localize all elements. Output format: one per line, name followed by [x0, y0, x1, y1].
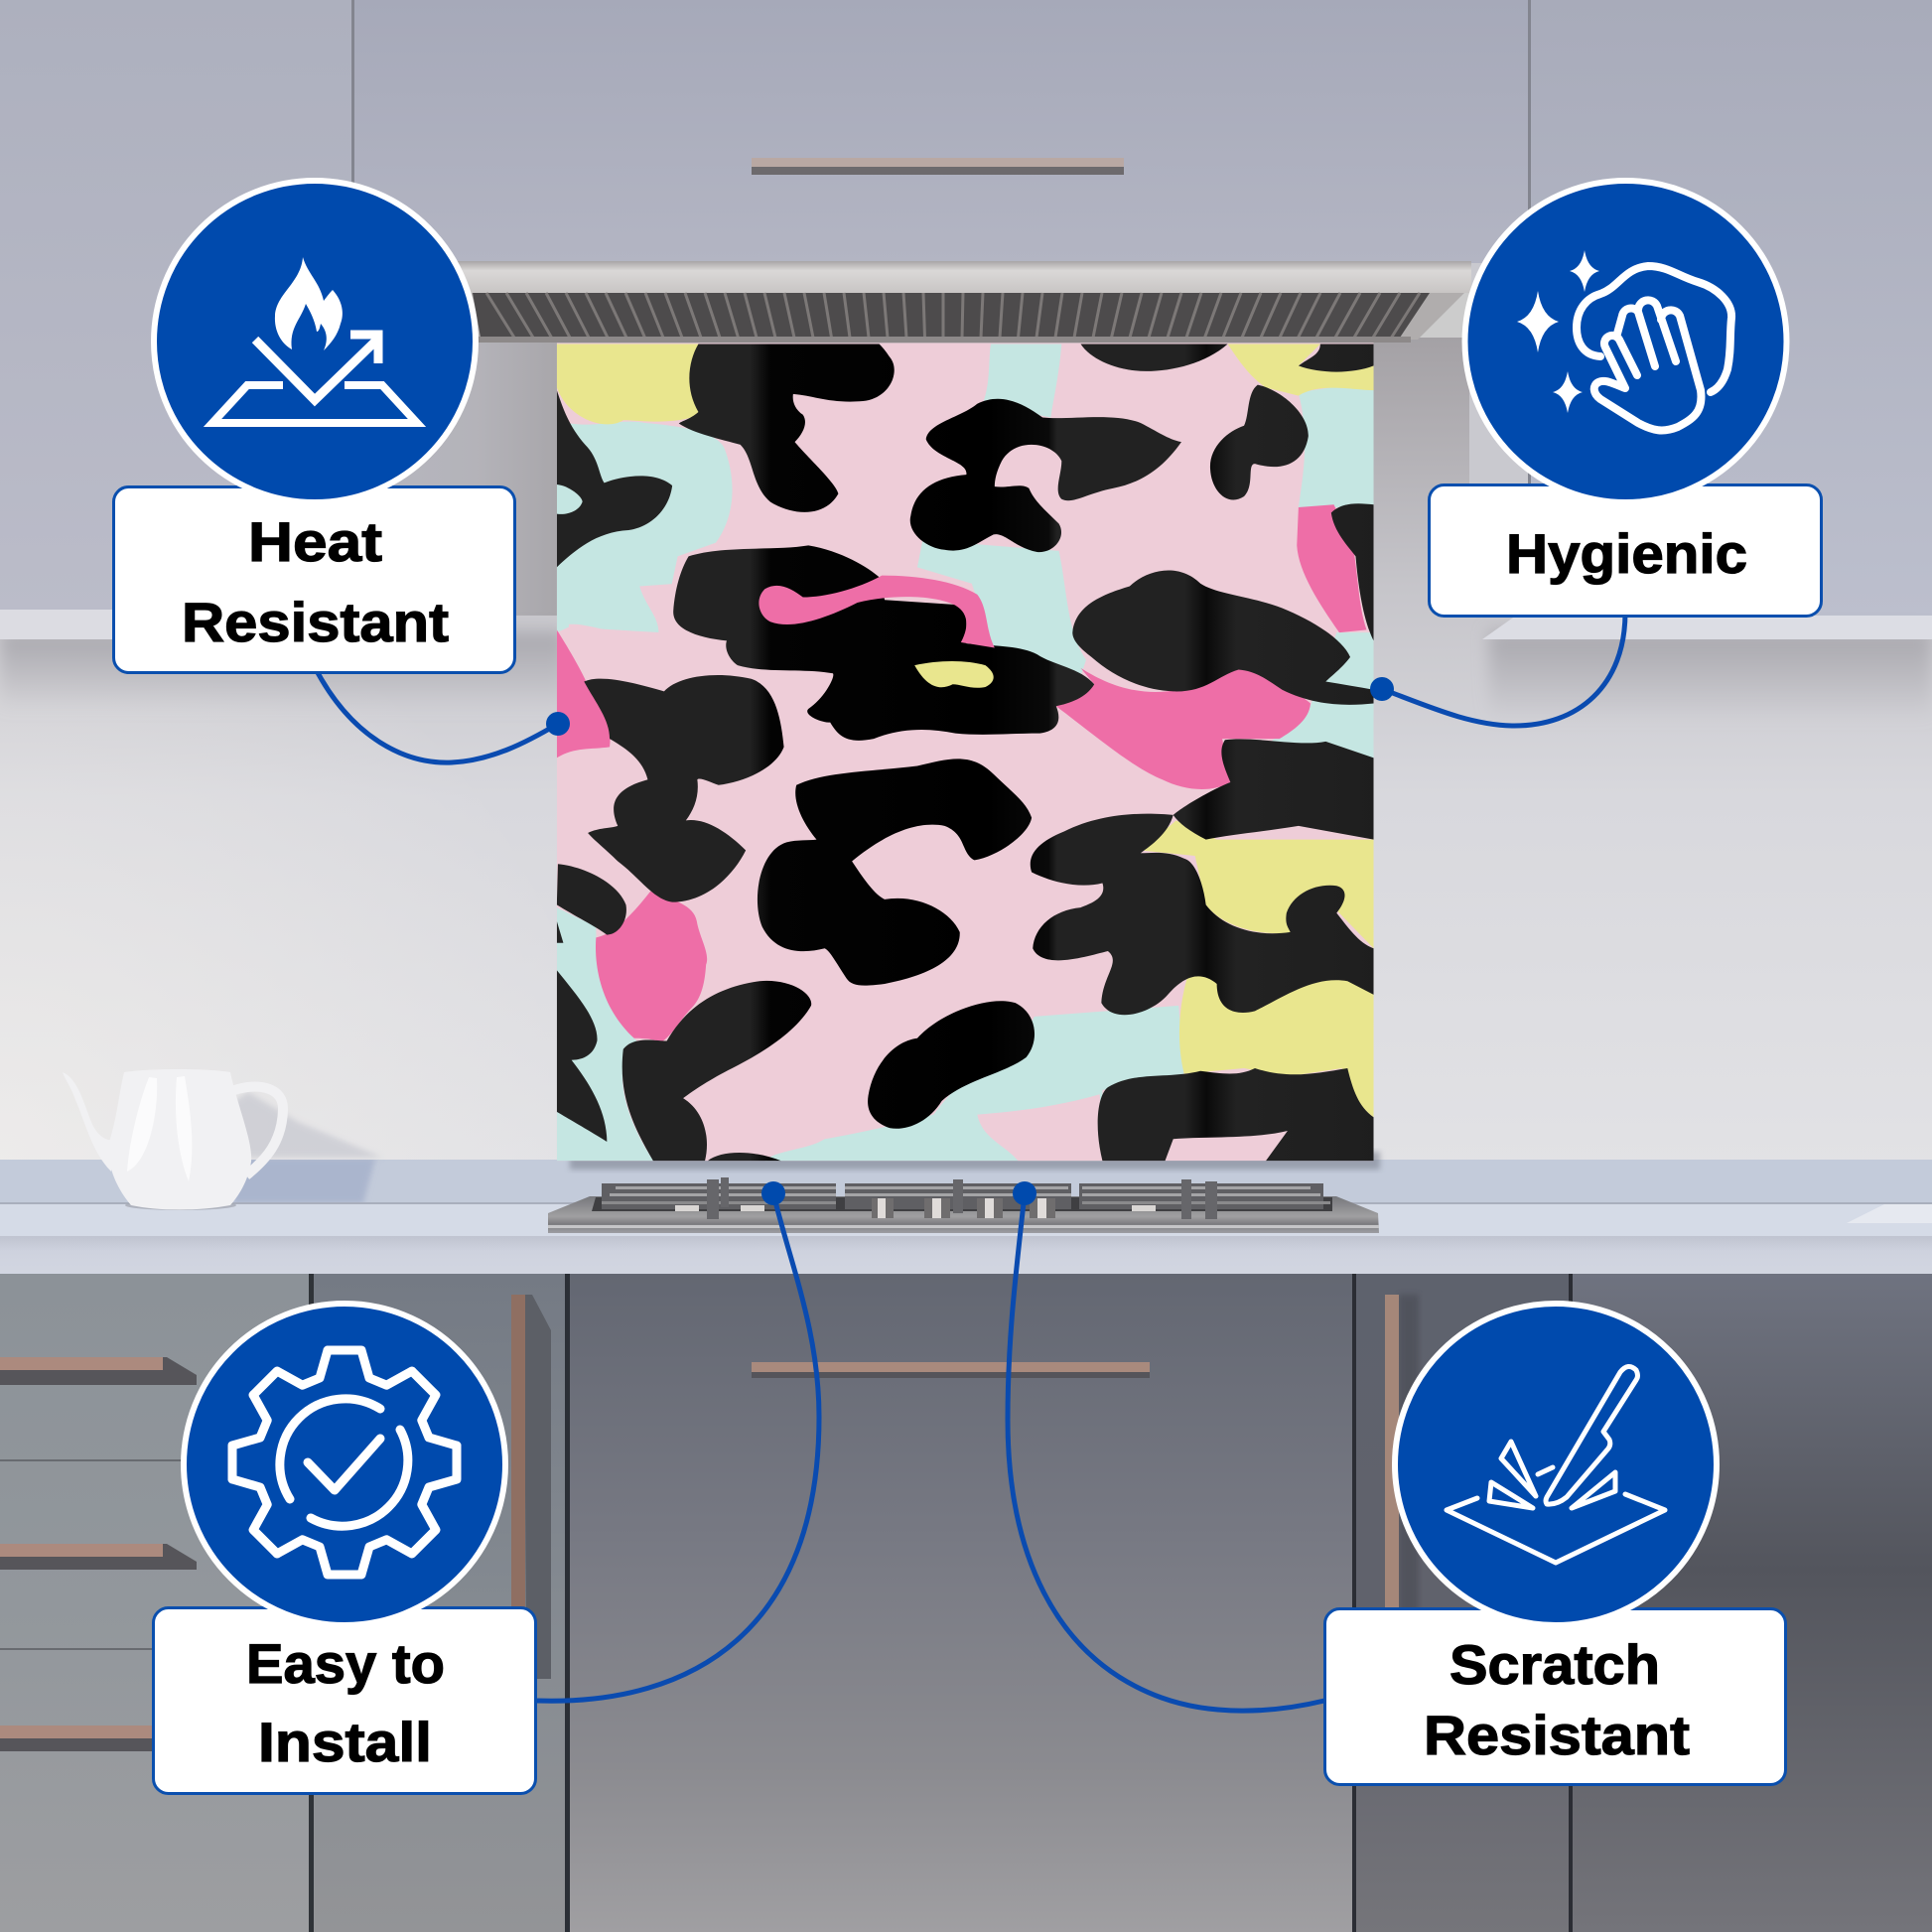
black spots — [557, 344, 1374, 1161]
icon circle — [154, 181, 476, 502]
label text: Resistant — [182, 591, 449, 653]
callout: hygienic — [1430, 181, 1821, 616]
teapot shadow on worktop — [233, 1158, 375, 1203]
label box — [153, 1608, 536, 1793]
wall tiles — [0, 338, 1932, 1172]
callout: scratch resistant — [1324, 1304, 1785, 1785]
label box — [1430, 484, 1821, 616]
upper cabinets — [0, 0, 1932, 616]
splashback panel shadow — [570, 1152, 1380, 1170]
label text — [182, 510, 449, 653]
teapot shadow on wall — [233, 1092, 382, 1158]
label text — [246, 1632, 445, 1773]
callout: easy to install — [153, 1304, 536, 1793]
pink overlays — [569, 584, 1105, 1161]
mint hole in left spot — [557, 484, 583, 514]
mint patches — [557, 344, 1374, 1161]
icon: hand wiping with sparkles — [1517, 250, 1731, 430]
centre door handle — [752, 1362, 1150, 1378]
hob grate middle — [845, 1179, 1071, 1213]
hob — [548, 1177, 1379, 1233]
hob knobs — [872, 1198, 1055, 1218]
hot pink tadpole over central spot — [759, 576, 995, 648]
label box — [1324, 1608, 1785, 1785]
label text: Resistant — [1424, 1704, 1690, 1766]
hot pink patches — [557, 504, 1366, 1042]
label text: Easy to — [246, 1632, 445, 1695]
label text — [1424, 1633, 1690, 1766]
lower cabinets — [0, 1274, 1932, 1932]
callout: heat resistant — [113, 181, 514, 673]
hob burners — [675, 1205, 1156, 1211]
teapot — [63, 1069, 283, 1210]
connector: easy to install — [537, 1181, 819, 1701]
connector: scratch resistant — [1008, 1181, 1324, 1711]
connector: hygienic — [1370, 613, 1625, 726]
cabinet handle top — [752, 158, 1124, 175]
label text: Heat — [248, 510, 382, 573]
splashback panel: camouflage pattern — [557, 343, 1374, 1161]
drawer handles — [0, 1357, 197, 1751]
icon: knife scratching surface — [1447, 1366, 1665, 1563]
label text: Hygienic — [1506, 522, 1747, 585]
icon circle — [1395, 1304, 1717, 1625]
worktop back edge line — [0, 1202, 1932, 1204]
vertical door handles — [511, 1295, 1419, 1679]
icon circle — [1465, 181, 1787, 502]
worktop — [0, 1160, 1932, 1274]
under-cabinet ledges — [0, 610, 1932, 639]
connector: heat resistant — [315, 667, 570, 762]
label box — [113, 486, 514, 673]
pink base — [557, 343, 1374, 1161]
hob grate right — [1079, 1179, 1330, 1219]
label text: Scratch — [1449, 1633, 1660, 1696]
icon circle — [184, 1304, 505, 1625]
label text: Install — [258, 1711, 432, 1773]
yellow eye in central spot — [914, 661, 994, 688]
hob grate left — [602, 1177, 836, 1219]
yellow patches — [557, 344, 1374, 1117]
under-cabinet shadows — [0, 631, 1932, 721]
icon: gear with check mark — [217, 1335, 472, 1589]
cooker hood — [457, 261, 1471, 343]
icon: flame on reflecting surface — [212, 257, 417, 423]
